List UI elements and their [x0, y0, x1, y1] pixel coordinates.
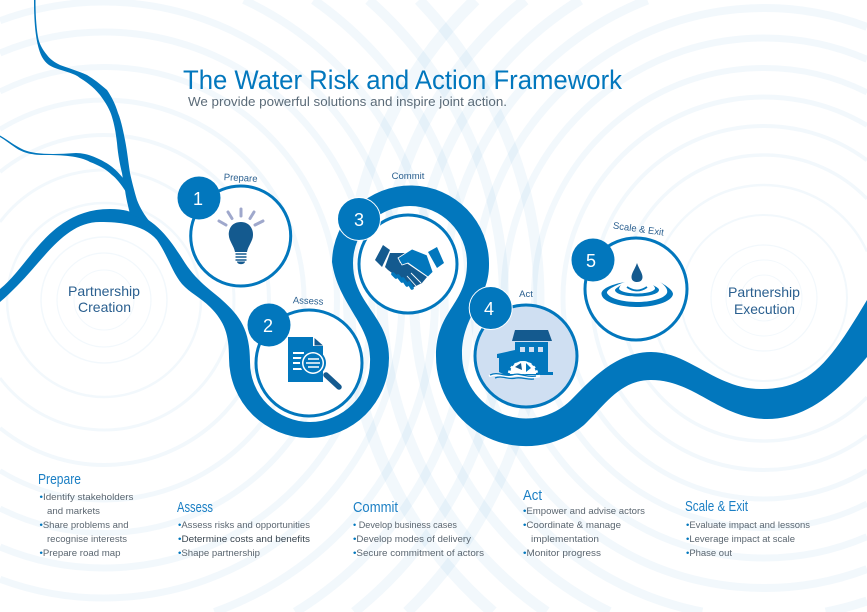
river: main tributary — [34, 0, 150, 222]
step 1: prepare: 1 — [193, 189, 203, 209]
step 4: act: Act — [519, 289, 533, 300]
step 3: commit — [338, 171, 457, 313]
text block: prepare: •Share problems and — [40, 520, 128, 531]
subtitle: We provide powerful solutions and inspire joint action. — [188, 94, 507, 109]
text block: prepare — [38, 472, 134, 559]
step 2: assess: 2 — [263, 316, 273, 336]
step 2: assess — [248, 295, 362, 416]
text block: assess — [177, 500, 310, 559]
text block: act — [523, 488, 645, 559]
step 4: act — [469, 286, 577, 407]
text block: act: •Empower and advise actors — [523, 506, 645, 517]
text block: act: •Coordinate & manage — [523, 520, 621, 531]
step 5: scale and exit: Scale & Exit — [612, 221, 665, 239]
river: second tributary — [0, 136, 126, 192]
text block: scale and exit: •Evaluate impact and lessons — [686, 520, 810, 531]
step 5: scale and exit: 5 — [586, 251, 596, 271]
text block: assess: •Shape partnership — [178, 548, 260, 559]
text block: scale and exit: •Leverage impact at scale — [686, 534, 795, 545]
text block: prepare: recognise interests — [47, 534, 127, 545]
icon: document and magnifier — [288, 337, 339, 387]
text block: assess: •Determine costs and benefits — [178, 534, 310, 545]
text block: act: implementation — [531, 534, 599, 545]
text block: assess: •Assess risks and opportunities — [178, 520, 310, 531]
label: partnership creation — [68, 283, 140, 315]
icon: light bulb — [219, 209, 263, 264]
step 2: assess: Assess — [293, 295, 324, 308]
text block: commit: Commit — [353, 500, 398, 516]
text block: commit: •Secure commitment of actors — [353, 548, 484, 559]
text block: commit — [353, 500, 484, 559]
label: partnership creation: Creation — [78, 299, 131, 315]
label: partnership execution: Partnership — [728, 284, 800, 300]
step 5: scale and exit — [572, 221, 687, 340]
step 1: prepare — [178, 172, 291, 286]
text block: commit: •Develop modes of delivery — [353, 534, 471, 545]
text block: prepare: Prepare — [38, 472, 81, 488]
text block: scale and exit: Scale & Exit — [685, 499, 748, 515]
text block: prepare: •Prepare road map — [40, 548, 121, 559]
icon: handshake — [375, 245, 444, 288]
text block: commit: • Develop business cases — [353, 520, 457, 531]
step 4: act: 4 — [484, 299, 494, 319]
river: main stream — [0, 185, 867, 446]
text block: scale and exit: •Phase out — [686, 548, 732, 559]
step 1: prepare: Prepare — [223, 172, 258, 185]
step 3: commit: Commit — [392, 171, 425, 182]
text block: prepare: •Identify stakeholders — [40, 492, 134, 503]
title: The Water Risk and Action Framework — [183, 65, 622, 95]
icon: water mill — [489, 330, 553, 379]
text block: act: •Monitor progress — [523, 548, 601, 559]
label: partnership creation: Partnership — [68, 283, 140, 299]
text block: scale and exit — [685, 499, 810, 559]
icon: water drop and ripples — [601, 263, 673, 307]
text block: prepare: and markets — [47, 506, 100, 517]
text block: act: Act — [523, 488, 542, 504]
text block: assess: Assess — [177, 500, 213, 516]
label: partnership execution: Execution — [734, 301, 795, 317]
step 3: commit: 3 — [354, 210, 364, 230]
label: partnership execution — [728, 284, 800, 317]
